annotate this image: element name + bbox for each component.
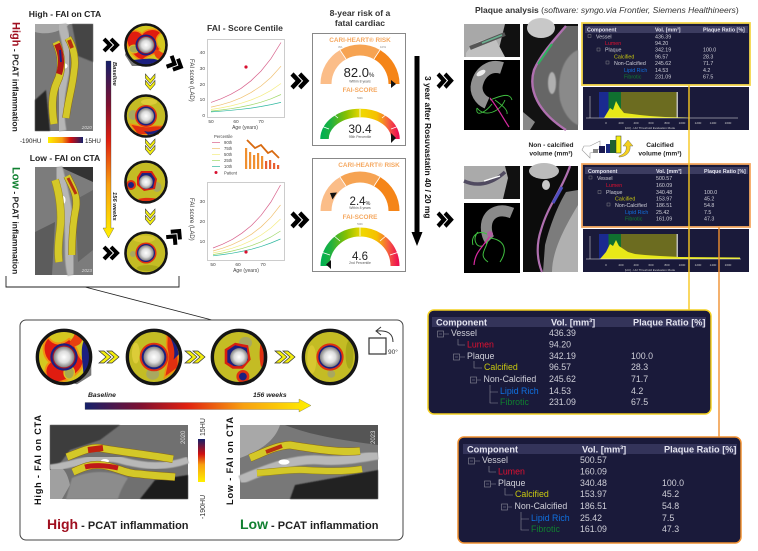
panel: upper gauges: 3% bbox=[338, 45, 343, 49]
chart: upper centile: 0 bbox=[202, 113, 205, 119]
cross-section: 156 weeks bbox=[126, 232, 166, 274]
table: enlarged lower results bbox=[458, 437, 741, 543]
table: lower results: Plaque Ratio [%] bbox=[704, 169, 746, 175]
table: lower results: Vessel bbox=[597, 176, 613, 182]
icon: 90 degree rotation: 90° bbox=[388, 348, 398, 356]
table: lower results: 100.0 bbox=[704, 190, 717, 196]
caption: low PCAT: Low - PCAT inflammation bbox=[240, 516, 379, 532]
CTA image: high FAI horizontal bbox=[50, 425, 188, 499]
table: enlarged upper results: Plaque Ratio [%] bbox=[633, 318, 706, 328]
table: upper results: Plaque bbox=[605, 48, 622, 54]
colour scale: -190HU to 15HU: -190HU bbox=[20, 138, 41, 145]
panel: lower gauges: 50th bbox=[357, 222, 363, 226]
panel: upper gauges: Within 8 years bbox=[349, 80, 371, 84]
table: enlarged lower results: 500.57 bbox=[580, 455, 607, 465]
table: enlarged lower results: 161.09 bbox=[580, 524, 607, 534]
CTA image: high FAI 2020: 2020 bbox=[81, 125, 92, 130]
chart: lower centile: 30 bbox=[200, 199, 205, 205]
panel: magnified detail bbox=[20, 320, 403, 540]
table: lower results: Plaque bbox=[606, 190, 623, 196]
panel: lower gauges: 2.4% bbox=[350, 196, 371, 208]
cross-section: follow-up 2 bbox=[126, 96, 166, 136]
table: enlarged upper results: Lipid Rich bbox=[500, 386, 539, 396]
table: lower results: 500.57 bbox=[656, 176, 672, 182]
table: enlarged upper results: 28.3 bbox=[631, 362, 648, 372]
table: upper results: Fibrotic bbox=[624, 74, 642, 80]
table: lower results bbox=[582, 164, 750, 227]
panel: upper gauges: 82.0% bbox=[344, 65, 375, 80]
cross-section 2 rotated bbox=[127, 330, 181, 384]
table: lower results: Lumen bbox=[606, 183, 622, 189]
table: upper results: Lumen bbox=[605, 41, 621, 47]
CTA image: low FAI horizontal: 2023 bbox=[371, 430, 377, 444]
table: lower results: 47.3 bbox=[704, 216, 714, 222]
icon: declining bars and trend bbox=[245, 140, 279, 169]
panel: upper gauges: CARI-HEART® RISK bbox=[329, 36, 391, 44]
CTA image: high FAI 2020 bbox=[35, 24, 93, 131]
table: lower results: 161.09 bbox=[656, 216, 672, 222]
chart: upper centile bbox=[188, 40, 284, 131]
table: enlarged upper results: 14.53 bbox=[549, 386, 571, 396]
scan: upper 3D tree bbox=[464, 60, 520, 130]
label: baseline: Baseline bbox=[88, 392, 116, 399]
table: enlarged lower results: Component bbox=[467, 444, 518, 454]
caption: high PCAT: High - PCAT inflammation bbox=[47, 516, 189, 532]
table: lower results: 160.09 bbox=[656, 183, 672, 189]
legend: percentile: 90th bbox=[224, 140, 233, 145]
table: enlarged lower results: Lipid Rich bbox=[531, 513, 570, 523]
table: enlarged upper results: Vol. [mm³] bbox=[551, 318, 595, 328]
table: enlarged upper results: 4.2 bbox=[631, 386, 643, 396]
table: enlarged lower results: 25.42 bbox=[580, 513, 602, 523]
table: enlarged upper results: 342.19 bbox=[549, 351, 576, 361]
histogram: upper: 400 bbox=[633, 121, 639, 125]
histogram: lower: 1600 bbox=[725, 263, 732, 267]
heading: 8-year risk: 8-year risk of a bbox=[330, 8, 390, 18]
CTA image: high FAI horizontal: 2020 bbox=[181, 430, 187, 444]
rotated label: low PCAT inflammation: Low - PCAT inflammation bbox=[10, 167, 22, 274]
scan: lower CPR bbox=[523, 163, 578, 272]
legend: percentile bbox=[212, 134, 238, 176]
table: enlarged upper results: Vessel bbox=[451, 328, 477, 338]
chart: lower centile bbox=[188, 182, 284, 274]
icon: volume shift bars bbox=[582, 136, 633, 158]
chevron down 2 bbox=[145, 139, 155, 155]
table: upper results: Plaque Ratio [%] bbox=[703, 28, 745, 34]
table: enlarged upper results: Calcified bbox=[484, 362, 518, 372]
table: upper results: Calcified bbox=[614, 54, 634, 60]
table: lower results: 45.2 bbox=[704, 196, 714, 202]
table: enlarged lower results: 340.48 bbox=[580, 478, 607, 488]
colour scale: -190HU to 15HU: 15HU bbox=[85, 138, 101, 145]
table: enlarged upper results: 436.39 bbox=[549, 328, 576, 338]
scan: upper CPR bbox=[523, 18, 578, 130]
bracket bbox=[6, 276, 212, 320]
table: enlarged lower results: Non-Calcified bbox=[514, 501, 567, 511]
chevron down 3 bbox=[145, 209, 155, 225]
table: enlarged lower results: 54.8 bbox=[662, 501, 679, 511]
table: upper results: Lipid Rich bbox=[624, 68, 647, 74]
chart: upper centile: 60 bbox=[233, 119, 239, 125]
histogram: upper: 1600 bbox=[725, 121, 732, 125]
panel: upper gauges: 30.4 bbox=[348, 122, 372, 136]
scan: upper axial bbox=[464, 24, 520, 57]
table: upper results: Vessel bbox=[596, 34, 612, 40]
heading: low FAI on CTA: Low - FAI on CTA bbox=[30, 153, 100, 163]
label: calcified volume: volume (mm³) bbox=[638, 150, 682, 158]
chevron 3 bbox=[275, 351, 295, 363]
arrow to lower chart bbox=[166, 227, 184, 245]
panel: lower gauges: Within 8 years bbox=[349, 206, 371, 210]
panel: lower gauges: CARI-HEART® RISK bbox=[338, 161, 400, 169]
rotated label: high FAI: High - FAI on CTA bbox=[33, 415, 43, 505]
chart: lower centile: 10 bbox=[200, 239, 205, 245]
table: lower results: 340.48 bbox=[656, 190, 672, 196]
legend: percentile: Percentile bbox=[214, 134, 233, 139]
cross-section 4 rotated bbox=[303, 330, 357, 384]
label: 156 weeks: 156 weeks bbox=[253, 392, 287, 399]
chart: upper centile: 30 bbox=[200, 66, 205, 72]
heading: FAI score centile: FAI - Score Centile bbox=[207, 23, 283, 33]
table: enlarged upper results: Non-Calcified bbox=[484, 374, 536, 384]
heading: plaque analysis: Plaque analysis (software: syngo.via Frontier, Siemens Healthineers) bbox=[475, 5, 739, 15]
gradient arrow: baseline to 156 weeks bbox=[103, 61, 114, 238]
legend: percentile: 10th bbox=[224, 164, 233, 169]
histogram: upper: 1000 bbox=[679, 121, 686, 125]
table: enlarged upper results: 94.20 bbox=[549, 340, 571, 350]
connector: orange bbox=[718, 227, 720, 438]
histogram: lower: [HU] - HU Threshold Evaluation Mode bbox=[625, 268, 675, 272]
arrow to lower gauge bbox=[292, 213, 306, 227]
chevron 1 bbox=[99, 351, 119, 363]
table: upper results: 4.2 bbox=[703, 68, 710, 74]
colour scale: -190HU to 15HU bbox=[20, 137, 101, 145]
table: upper results: Component bbox=[587, 28, 617, 34]
label: baseline: Baseline bbox=[111, 62, 117, 87]
label: 156 weeks: 156 weeks bbox=[111, 192, 117, 221]
table: enlarged lower results: 153.97 bbox=[580, 489, 607, 499]
CTA image: low FAI 2023 bbox=[35, 167, 93, 275]
chart: lower centile: 60 bbox=[235, 262, 241, 268]
scan: lower 3D tree bbox=[464, 203, 520, 273]
table: lower results: 25.42 bbox=[656, 210, 669, 216]
histogram: upper: [HU] - HU Threshold Evaluation Mode bbox=[625, 126, 675, 130]
table: upper results bbox=[582, 23, 750, 85]
table: enlarged upper results: 245.62 bbox=[549, 374, 576, 384]
table: enlarged lower results: 100.0 bbox=[662, 478, 684, 488]
colour scale vertical: 15HU bbox=[200, 418, 207, 436]
big arrow: therapy bbox=[412, 56, 422, 246]
histogram: lower: 1000 bbox=[679, 263, 686, 267]
histogram: lower bbox=[583, 229, 749, 272]
chart: lower centile: 70 bbox=[260, 262, 266, 268]
chart: lower centile: FAI score (LAD) bbox=[188, 198, 194, 241]
table: upper results: 96.57 bbox=[655, 54, 668, 60]
heading: 8-year risk: fatal cardiac bbox=[335, 18, 385, 28]
table: enlarged lower results: Fibrotic bbox=[531, 524, 560, 534]
panel: lower gauges bbox=[312, 158, 406, 272]
table: upper results: 28.3 bbox=[703, 54, 713, 60]
histogram: upper bbox=[583, 87, 749, 130]
table: upper results: 14.53 bbox=[655, 68, 668, 74]
histogram: upper: 0 bbox=[605, 121, 607, 125]
table: upper results: 231.09 bbox=[655, 74, 671, 80]
chart: lower centile: 20 bbox=[200, 219, 205, 225]
cross-section 1 rotated bbox=[37, 330, 91, 384]
histogram: upper: 1400 bbox=[710, 121, 717, 125]
table: enlarged lower results: Plaque bbox=[498, 478, 525, 488]
gradient arrow bbox=[85, 399, 311, 412]
table: lower results: Component bbox=[588, 169, 618, 175]
arrow to upper plaque analysis bbox=[438, 74, 451, 87]
table: enlarged lower results: Plaque Ratio [%] bbox=[664, 444, 736, 454]
table: enlarged upper results: Component bbox=[436, 318, 487, 328]
connector: yellow bbox=[688, 85, 690, 311]
table: upper results: 436.39 bbox=[655, 34, 671, 40]
icon: 90 degree rotation bbox=[369, 327, 398, 356]
table: lower results: 186.51 bbox=[656, 203, 672, 209]
table: enlarged lower results: 186.51 bbox=[580, 501, 607, 511]
histogram: lower: 800 bbox=[664, 263, 670, 267]
table: lower results: 54.8 bbox=[704, 203, 714, 209]
table: enlarged upper results: 71.7 bbox=[631, 374, 648, 384]
table: lower results: Non-Calcified bbox=[615, 203, 647, 209]
chart: lower centile: Age (years) bbox=[233, 268, 259, 274]
histogram: lower: 1400 bbox=[710, 263, 717, 267]
table: enlarged upper results: Fibrotic bbox=[500, 397, 529, 407]
table: lower results: Calcified bbox=[615, 196, 635, 202]
arrow to upper gauge bbox=[292, 74, 306, 88]
table: enlarged lower results: 7.5 bbox=[662, 513, 674, 523]
table: enlarged lower results: Vol. [mm³] bbox=[582, 444, 626, 454]
table: enlarged upper results: 100.0 bbox=[631, 351, 653, 361]
histogram: upper: 1200 bbox=[695, 121, 702, 125]
legend: percentile: 75th bbox=[224, 146, 233, 151]
table: lower results: Lipid Rich bbox=[625, 210, 648, 216]
table: upper results: 245.62 bbox=[655, 61, 671, 67]
chart: upper centile: FAI score (LAD) bbox=[188, 59, 194, 102]
panel: upper gauges: 10% bbox=[380, 45, 386, 49]
table: enlarged lower results: Calcified bbox=[515, 489, 549, 499]
label: calcified volume: Calcified bbox=[646, 142, 674, 149]
scan: lower axial bbox=[464, 166, 520, 199]
histogram: upper: 600 bbox=[648, 121, 654, 125]
chevron down 1 bbox=[145, 74, 155, 90]
rotated label: therapy: 3 year after Rosuvastatin 40 / 20 mg bbox=[423, 76, 433, 218]
table: enlarged upper results bbox=[428, 310, 711, 414]
histogram: lower: 1200 bbox=[695, 263, 702, 267]
chart: upper centile: 20 bbox=[200, 82, 205, 88]
histogram: upper: 200 bbox=[618, 121, 624, 125]
heading: high FAI on CTA: High - FAI on CTA bbox=[29, 9, 101, 19]
label: non-calcified volume: volume (mm³) bbox=[529, 150, 573, 158]
rotated label: low FAI: Low - FAI on CTA bbox=[225, 417, 235, 505]
panel: upper gauges bbox=[312, 34, 406, 146]
table: lower results: 7.5 bbox=[704, 210, 711, 216]
table: upper results: 94.20 bbox=[655, 41, 668, 47]
table: enlarged upper results: 96.57 bbox=[549, 362, 571, 372]
panel: upper gauges: FAI-SCORE bbox=[343, 87, 378, 94]
table: lower results: Fibrotic bbox=[625, 216, 643, 222]
table: enlarged upper results: 231.09 bbox=[549, 397, 576, 407]
legend: percentile: Patient bbox=[224, 170, 238, 176]
colour scale vertical bbox=[198, 418, 207, 519]
CTA image: low FAI horizontal bbox=[240, 425, 378, 499]
chart: upper centile: 50 bbox=[208, 119, 214, 125]
cross-section: follow-up 3 bbox=[126, 162, 166, 203]
legend: percentile: 25th bbox=[224, 158, 233, 163]
table: enlarged upper results: 67.5 bbox=[631, 397, 648, 407]
arrow to upper chart bbox=[167, 56, 183, 72]
cross-section: baseline bbox=[125, 24, 166, 66]
panel: lower gauges: 4.6 bbox=[352, 251, 368, 263]
table: enlarged lower results: 47.3 bbox=[662, 524, 679, 534]
panel: lower gauges: FAI-SCORE bbox=[343, 214, 378, 221]
arrow to lower plaque analysis bbox=[438, 213, 451, 226]
chart: upper centile: 10 bbox=[200, 97, 205, 103]
table: upper results: Non-Calcified bbox=[614, 61, 646, 67]
chart: upper centile: Age (years) bbox=[232, 125, 258, 131]
colour scale vertical: -190HU bbox=[200, 495, 207, 519]
table: upper results: 67.5 bbox=[703, 74, 713, 80]
histogram: lower: 200 bbox=[618, 263, 624, 267]
panel: upper gauges: 95th Percentile bbox=[349, 135, 371, 139]
histogram: lower: 600 bbox=[648, 263, 654, 267]
chevron 2 bbox=[185, 351, 205, 363]
histogram: lower: 0 bbox=[605, 263, 607, 267]
chart: upper centile: 70 bbox=[258, 119, 264, 125]
table: enlarged lower results: Vessel bbox=[482, 455, 508, 465]
table: enlarged lower results: Lumen bbox=[498, 466, 525, 476]
table: upper results: 71.7 bbox=[703, 61, 713, 67]
table: enlarged lower results: 160.09 bbox=[580, 466, 607, 476]
panel: upper gauges: 50th bbox=[357, 96, 363, 100]
chart: lower centile: 50 bbox=[210, 262, 216, 268]
chart: upper centile: 40 bbox=[200, 50, 205, 56]
histogram: lower: 400 bbox=[633, 263, 639, 267]
table: enlarged upper results: Lumen bbox=[467, 340, 494, 350]
table: upper results: 342.19 bbox=[655, 48, 671, 54]
label: non-calcified volume: Non - calcified bbox=[528, 142, 574, 149]
cross-section 3 rotated bbox=[212, 330, 266, 384]
arrow: high CTA to cross-section bbox=[104, 39, 117, 51]
table: enlarged lower results: 45.2 bbox=[662, 489, 679, 499]
rotated label: high PCAT inflammation: High - PCAT inflammation bbox=[10, 22, 22, 132]
panel: lower gauges: 2nd Percentile bbox=[349, 261, 371, 265]
table: lower results: 153.97 bbox=[656, 196, 672, 202]
table: upper results: Vol. [mm³] bbox=[655, 28, 681, 34]
table: upper results: 100.0 bbox=[703, 48, 716, 54]
table: lower results: Vol. [mm³] bbox=[656, 169, 682, 175]
CTA image: low FAI 2023: 2023 bbox=[81, 268, 92, 273]
table: enlarged upper results: Plaque bbox=[467, 351, 494, 361]
arrow: low CTA to cross-section bbox=[104, 247, 117, 259]
legend: percentile: 50th bbox=[224, 152, 233, 157]
histogram: upper: 800 bbox=[664, 121, 670, 125]
